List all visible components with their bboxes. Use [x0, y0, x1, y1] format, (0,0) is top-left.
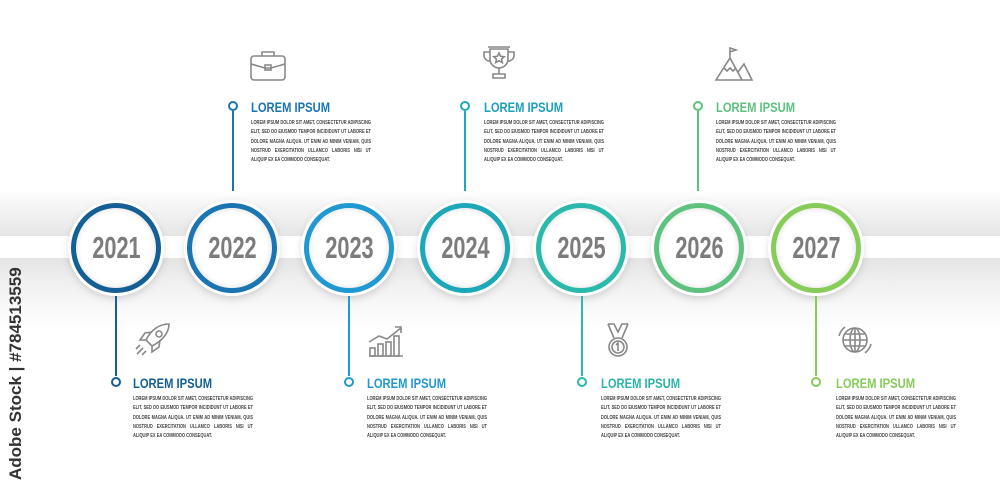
- text: 2025: ALIQUIP EX EA COMMODO CONSEQUAT.: [601, 433, 680, 439]
- text: 2022: [251, 99, 371, 163]
- text: 2021: [133, 375, 253, 439]
- circle: 2021: 2021: [92, 230, 140, 265]
- text: 2022: DOLORE MAGNA ALIQUA. UT ENIM AD MINIM VENIAM, QUIS: [251, 139, 371, 145]
- text: 2021: ELIT, SED DO EIUSMOD TEMPOR INCIDIDUNT UT LABORE ET: [133, 405, 253, 411]
- text: 2021: ALIQUIP EX EA COMMODO CONSEQUAT.: [133, 433, 212, 439]
- circle: 2024: 2024: [441, 230, 489, 265]
- circle: 2022: 2022: [208, 230, 256, 265]
- dot 2026: [693, 101, 703, 111]
- text: 2023: ALIQUIP EX EA COMMODO CONSEQUAT.: [367, 433, 446, 439]
- connector 2023: [348, 296, 350, 376]
- connector 2025: [581, 296, 583, 376]
- connector 2027: [815, 296, 817, 376]
- icon: growth chart: [368, 326, 403, 357]
- text: 2024: DOLORE MAGNA ALIQUA. UT ENIM AD MINIM VENIAM, QUIS: [484, 139, 604, 145]
- text: 2022: LOREM IPSUM: [251, 99, 330, 115]
- circle: 2027: 2027: [792, 230, 840, 265]
- text: 2026: LOREM IPSUM DOLOR SIT AMET, CONSECTETUR ADIPISCING: [716, 120, 836, 126]
- icon: briefcase: [250, 51, 286, 81]
- watermark: vertical stock label: Adobe Stock | #784513559: [6, 267, 25, 480]
- text: 2025: NOSTRUD EXERCITATION ULLAMCO LABORIS NISI UT: [601, 424, 721, 430]
- connector 2024: [464, 111, 466, 191]
- text: 2023: LOREM IPSUM: [367, 375, 446, 391]
- circle: 2023: [304, 203, 394, 293]
- dot 2025: [577, 377, 587, 387]
- text: 2025: [601, 375, 721, 439]
- circle: 2024: [420, 203, 510, 293]
- text: 2027: NOSTRUD EXERCITATION ULLAMCO LABORIS NISI UT: [836, 424, 956, 430]
- text: 2027: LOREM IPSUM: [836, 375, 915, 391]
- circle: 2025: 2025: [557, 230, 605, 265]
- circle: 2023: 2023: [325, 230, 373, 265]
- text: 2027: ALIQUIP EX EA COMMODO CONSEQUAT.: [836, 433, 915, 439]
- text: 2023: NOSTRUD EXERCITATION ULLAMCO LABORIS NISI UT: [367, 424, 487, 430]
- text: 2027: LOREM IPSUM DOLOR SIT AMET, CONSECTETUR ADIPISCING: [836, 396, 956, 402]
- icon: trophy: [483, 46, 515, 79]
- text: 2024: LOREM IPSUM DOLOR SIT AMET, CONSECTETUR ADIPISCING: [484, 120, 604, 126]
- connector 2021: [115, 296, 117, 376]
- text: 2024: LOREM IPSUM: [484, 99, 563, 115]
- connector 2026: [697, 111, 699, 191]
- text: 2021: LOREM IPSUM: [133, 375, 212, 391]
- text: 2026: DOLORE MAGNA ALIQUA. UT ENIM AD MINIM VENIAM, QUIS: [716, 139, 836, 145]
- text: 2023: DOLORE MAGNA ALIQUA. UT ENIM AD MINIM VENIAM, QUIS: [367, 415, 487, 421]
- text: 2025: LOREM IPSUM: [601, 375, 680, 391]
- dot 2021: [111, 377, 121, 387]
- text: 2027: [836, 375, 956, 439]
- icon: globe: [838, 326, 872, 354]
- circle: 2026: 2026: [675, 230, 723, 265]
- connector 2022: [232, 111, 234, 191]
- text: 2022: NOSTRUD EXERCITATION ULLAMCO LABORIS NISI UT: [251, 148, 371, 154]
- dot 2022: [228, 101, 238, 111]
- dot 2027: [811, 377, 821, 387]
- text: 2023: [367, 375, 487, 439]
- text: 2027: DOLORE MAGNA ALIQUA. UT ENIM AD MINIM VENIAM, QUIS: [836, 415, 956, 421]
- text: 2022: LOREM IPSUM DOLOR SIT AMET, CONSECTETUR ADIPISCING: [251, 120, 371, 126]
- text: 2025: LOREM IPSUM DOLOR SIT AMET, CONSECTETUR ADIPISCING: [601, 396, 721, 402]
- text: 2026: ELIT, SED DO EIUSMOD TEMPOR INCIDIDUNT UT LABORE ET: [716, 129, 836, 135]
- text: 2021: DOLORE MAGNA ALIQUA. UT ENIM AD MINIM VENIAM, QUIS: [133, 415, 253, 421]
- text: 2024: [484, 99, 604, 163]
- text: 2022: ALIQUIP EX EA COMMODO CONSEQUAT.: [251, 157, 330, 163]
- text: 2021: NOSTRUD EXERCITATION ULLAMCO LABORIS NISI UT: [133, 424, 253, 430]
- text: 2026: ALIQUIP EX EA COMMODO CONSEQUAT.: [716, 157, 795, 163]
- text: 2025: DOLORE MAGNA ALIQUA. UT ENIM AD MINIM VENIAM, QUIS: [601, 415, 721, 421]
- text: 2025: ELIT, SED DO EIUSMOD TEMPOR INCIDIDUNT UT LABORE ET: [601, 405, 721, 411]
- icon: medal: [607, 323, 629, 357]
- text: 2021: LOREM IPSUM DOLOR SIT AMET, CONSECTETUR ADIPISCING: [133, 396, 253, 402]
- text: 2023: LOREM IPSUM DOLOR SIT AMET, CONSECTETUR ADIPISCING: [367, 396, 487, 402]
- text: 2024: NOSTRUD EXERCITATION ULLAMCO LABORIS NISI UT: [484, 148, 604, 154]
- icon: rocket: [136, 323, 170, 356]
- text: 2022: ELIT, SED DO EIUSMOD TEMPOR INCIDIDUNT UT LABORE ET: [251, 129, 371, 135]
- text: 2026: LOREM IPSUM: [716, 99, 795, 115]
- icon: mountain flag: [714, 46, 754, 81]
- text: 2027: ELIT, SED DO EIUSMOD TEMPOR INCIDIDUNT UT LABORE ET: [836, 405, 956, 411]
- circle: 2027: [771, 203, 861, 293]
- circle: 2021: [71, 203, 161, 293]
- text: 2024: ELIT, SED DO EIUSMOD TEMPOR INCIDIDUNT UT LABORE ET: [484, 129, 604, 135]
- text: 2026: [716, 99, 836, 163]
- text: 2026: NOSTRUD EXERCITATION ULLAMCO LABORIS NISI UT: [716, 148, 836, 154]
- text: 2024: ALIQUIP EX EA COMMODO CONSEQUAT.: [484, 157, 563, 163]
- dot 2023: [344, 377, 354, 387]
- text: 2023: ELIT, SED DO EIUSMOD TEMPOR INCIDIDUNT UT LABORE ET: [367, 405, 487, 411]
- circle: 2026: [654, 203, 744, 293]
- dot 2024: [460, 101, 470, 111]
- circle: 2022: [187, 203, 277, 293]
- circle: 2025: [536, 203, 626, 293]
